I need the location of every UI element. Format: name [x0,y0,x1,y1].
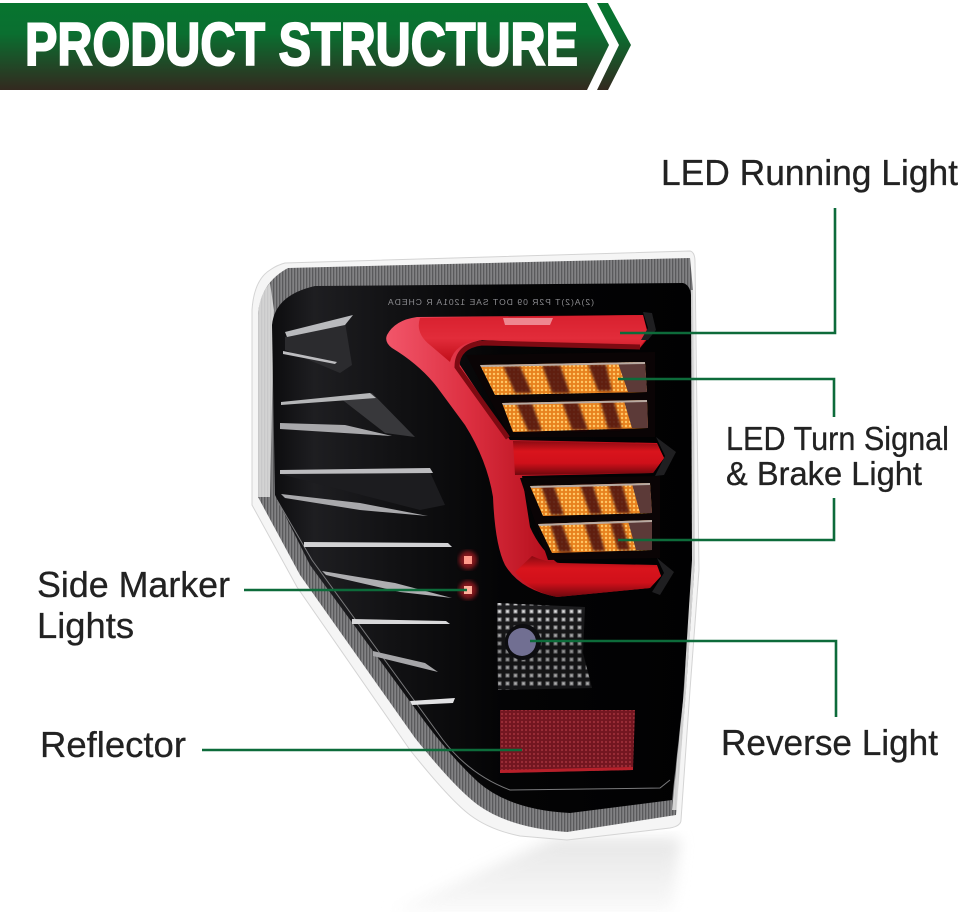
leader line: turn signal upper [618,379,834,417]
lower tube [515,556,661,597]
label: Side Marker Lights: Side Marker [37,564,230,605]
LED running light tube [386,315,664,597]
grey textured band [258,258,695,832]
inner tube ring [457,343,640,438]
label: LED Turn Signal & Brake Light [726,420,949,492]
black pointed fins [641,312,676,595]
leader line: reflector [202,749,522,751]
label: LED Turn Signal & Brake Light: LED Turn Signal [726,420,949,457]
leader line: reverse [530,641,836,717]
black housing [272,283,692,813]
leader line: LED running light [620,208,835,333]
title: PRODUCT STRUCTURE [25,11,578,78]
reflector [500,710,635,773]
upper tube bar [419,315,648,362]
inner housing edge line [277,500,670,790]
tube highlight [503,318,553,325]
tail light [252,251,699,840]
label: Side Marker Lights: Lights [37,605,134,646]
reverse light [497,603,592,690]
label: Reverse Light: Reverse Light [721,722,938,763]
LED panel: turn signal lower [502,400,648,432]
leader line: side marker [244,589,467,591]
side marker LEDs [459,551,477,599]
light right side of band [672,290,695,810]
label: Reflector: Reflector [40,724,186,765]
floor reflection [390,838,680,912]
moulded code text: (2)A(2)T P2R 09 DOT SAE 1201A R CHEDA [388,297,594,307]
leader line: brake lower [618,498,834,540]
middle red bar [513,441,664,475]
label: Side Marker Lights [37,564,230,646]
clear outer lens [252,251,699,840]
label: LED Turn Signal & Brake Light: & Brake Light [726,455,922,492]
label: LED Running Light: LED Running Light [661,152,958,193]
LED panel: brake upper [530,483,652,516]
LED panel surround [466,352,660,560]
title banner [0,3,631,90]
LED panel: brake lower [538,520,652,553]
LED panel: turn signal upper [480,362,647,395]
light left side of band [258,283,274,497]
housing ribs [280,315,455,705]
